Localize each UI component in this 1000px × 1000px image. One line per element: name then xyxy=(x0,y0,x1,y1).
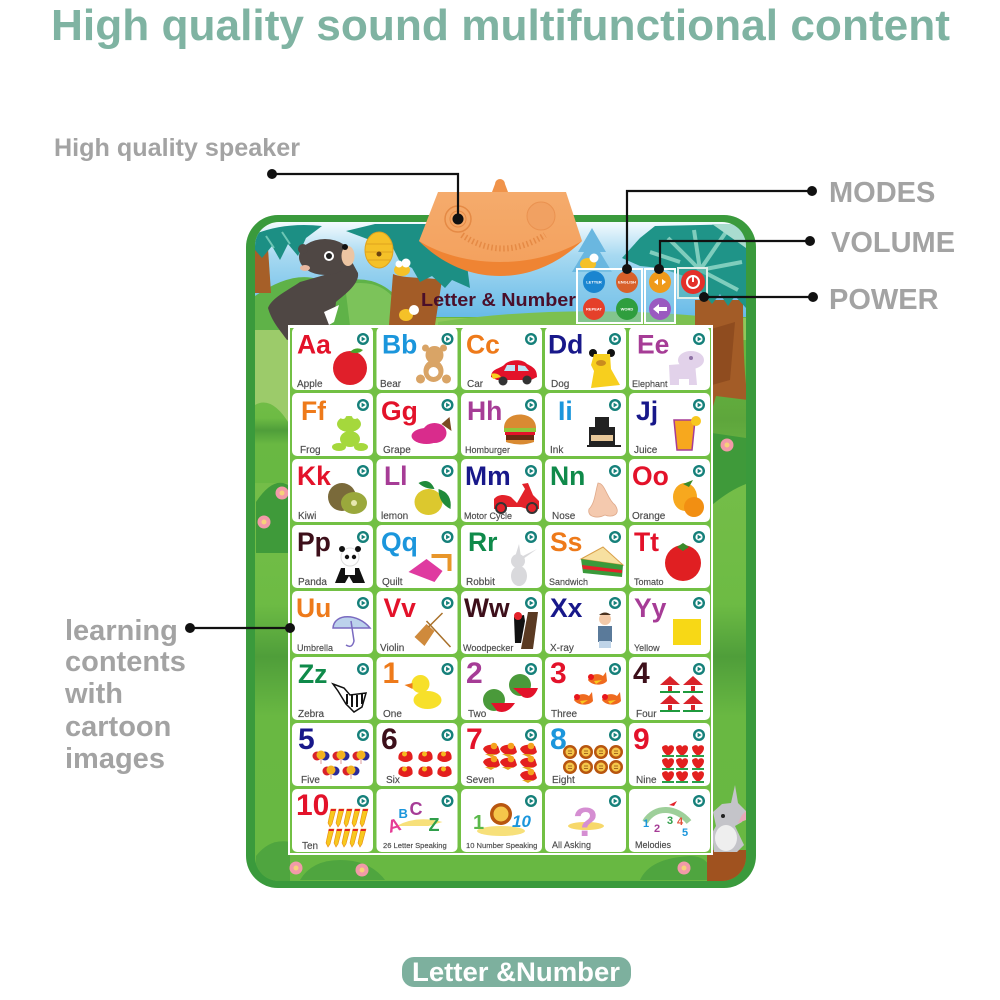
icon: ABC letters xyxy=(385,799,442,837)
card: Hh xyxy=(461,393,542,456)
icon: bee right xyxy=(580,254,598,270)
card: 8: Eight xyxy=(552,775,575,786)
card: Uu: Umbrella xyxy=(297,643,333,653)
card: 1: 1 xyxy=(382,657,399,690)
tree: right xyxy=(572,224,748,410)
card: 10 number speaking xyxy=(461,789,542,852)
card: Bb xyxy=(376,327,458,390)
icon: x-ray xyxy=(598,612,612,648)
card: Mm: Mm xyxy=(465,461,511,491)
card: Ww: Ww xyxy=(464,593,510,623)
card: Pp xyxy=(292,525,373,588)
icon: orange xyxy=(673,480,704,517)
card: Oo xyxy=(629,459,710,522)
callout line: learning contents xyxy=(185,623,295,633)
card: Zz: Zz xyxy=(298,659,327,689)
card: Ee: Ee xyxy=(637,330,669,360)
card: Zz xyxy=(292,657,373,720)
card: Kk: Kiwi xyxy=(298,511,316,522)
icon: rainbow and notes: 2 xyxy=(654,823,660,835)
card: Cc xyxy=(461,327,542,390)
icon: ten pencils xyxy=(326,809,368,847)
bush: bottom left xyxy=(256,841,290,881)
icon: rainbow and notes: 1 xyxy=(643,818,649,830)
card: Yy: Yellow xyxy=(634,643,660,653)
card: Aa: Aa xyxy=(297,330,331,360)
card: Ff: Frog xyxy=(300,445,321,456)
card: Hh: Homburger xyxy=(465,445,510,455)
button: repeat: REPEAT xyxy=(586,306,603,312)
label: volume: VOLUME xyxy=(831,227,955,259)
card: Aa: Apple xyxy=(297,379,323,390)
icon: rainbow and notes: 5 xyxy=(682,827,688,839)
card: Aa xyxy=(292,327,373,390)
icon: six flowers xyxy=(398,751,452,777)
icon: bee lower xyxy=(399,305,419,321)
icon: ABC letters: B xyxy=(398,806,408,821)
card: Ii: Ii xyxy=(558,396,573,426)
card: 8: 8 xyxy=(550,723,567,756)
control panel buttons xyxy=(577,268,707,323)
card: Vv: Vv xyxy=(384,593,416,623)
card: Xx: X-ray xyxy=(550,643,574,654)
card: Rr: Robbit xyxy=(466,577,495,588)
card: 3: 3 xyxy=(550,657,567,690)
icon: three hens xyxy=(574,672,621,705)
card: 5: 5 xyxy=(298,723,315,756)
icon: car xyxy=(491,360,537,386)
button: english: ENGLISH xyxy=(618,280,636,284)
icon: panda xyxy=(335,546,365,583)
card: Dd: Dog xyxy=(551,379,569,390)
card: Ss: Ss xyxy=(550,527,582,557)
card: Ee: Elephant xyxy=(632,379,668,389)
card: Pp: Pp xyxy=(297,527,331,557)
label: learning contents with cartoon images: learning xyxy=(65,615,178,647)
heading: letter and number: Letter & Number xyxy=(421,289,576,310)
icon: grape xyxy=(412,417,452,444)
icon: quilt xyxy=(408,554,452,582)
card: Dd: Dd xyxy=(548,330,583,360)
card: Jj: Jj xyxy=(636,396,658,426)
button: volume xyxy=(649,271,671,293)
button: letter: LETTER xyxy=(586,280,602,284)
card: Gg xyxy=(376,393,458,456)
card: Nn: Nn xyxy=(550,461,585,491)
icon: lemon xyxy=(414,481,451,515)
icon: yellow square xyxy=(673,619,701,645)
card: 9: Nine xyxy=(636,775,657,786)
card: Tt: Tomato xyxy=(634,577,664,587)
icon: lion with numbers xyxy=(473,803,531,836)
card: Hh: Hh xyxy=(467,396,502,426)
bush: right xyxy=(712,433,746,505)
card: 8 xyxy=(545,723,626,786)
card: 3: Three xyxy=(551,709,578,720)
icon: woodpecker xyxy=(514,612,538,649)
card: Rr: Rr xyxy=(468,527,497,557)
card: Jj: Juice xyxy=(634,445,658,456)
card: Ll xyxy=(376,459,458,522)
icon: seven ducks xyxy=(483,743,537,783)
icon: hamburger xyxy=(504,414,536,444)
card: Vv xyxy=(376,591,458,654)
card: 10 xyxy=(292,789,373,852)
card: Ww: Woodpecker xyxy=(463,643,513,653)
card: 26 letter speaking xyxy=(376,789,458,852)
tree: left xyxy=(255,225,322,293)
icon: tomato xyxy=(665,543,701,581)
icon: umbrella xyxy=(333,617,370,646)
card: 5: Five xyxy=(301,775,320,786)
button: word: WORD xyxy=(621,306,633,312)
card: all asking xyxy=(545,789,626,852)
icon: bear xyxy=(416,344,451,384)
card: Cc: Cc xyxy=(466,330,500,360)
card: Xx: Xx xyxy=(550,593,583,623)
card: 9 xyxy=(629,723,710,786)
card: Xx xyxy=(545,591,626,654)
icon: violin xyxy=(414,613,450,647)
callout line: volume xyxy=(654,236,815,274)
scene: sky and hills xyxy=(255,222,746,881)
card: 2: Two xyxy=(468,709,487,720)
card: Yy: Yy xyxy=(634,593,667,623)
icon: frog xyxy=(332,413,368,451)
icon: beehive xyxy=(365,232,393,268)
icon: zebra xyxy=(333,684,366,712)
label: learning contents with cartoon images xyxy=(64,615,186,775)
card: Rr xyxy=(461,525,542,588)
label: learning contents with cartoon images: cartoon xyxy=(65,711,171,743)
card: Qq xyxy=(376,525,458,588)
card: Vv: Violin xyxy=(380,643,404,654)
icon: rainbow and notes: 3 xyxy=(667,815,673,827)
card: Mm: Motor Cycle xyxy=(464,511,512,521)
button: back xyxy=(649,298,671,320)
card: 9: 9 xyxy=(633,723,650,756)
card: Ff: Ff xyxy=(301,396,326,426)
card: Ll: lemon xyxy=(381,511,408,522)
card: Bb: Bb xyxy=(382,330,417,360)
card: Nn xyxy=(545,459,626,522)
icon: eight lions xyxy=(563,745,623,774)
callout line: speaker xyxy=(267,169,464,224)
title: High quality sound multifunctional content xyxy=(51,1,950,50)
card: Ss: Sandwich xyxy=(549,577,588,587)
icon: lion with numbers: 1 xyxy=(473,812,484,834)
character: mole xyxy=(268,239,358,340)
card: Zz: Zebra xyxy=(298,709,325,720)
icon: lion with numbers: 10 xyxy=(512,812,531,831)
card: 6: Six xyxy=(386,775,400,786)
card: melodies: Melodies xyxy=(635,840,672,850)
card: 4 xyxy=(629,657,710,720)
icon: ABC letters: C xyxy=(410,799,422,819)
card: Jj xyxy=(629,393,710,456)
card: 4: 4 xyxy=(633,657,650,690)
character: bunny xyxy=(707,785,747,881)
alphabet and number grid xyxy=(288,325,713,855)
icon: duck xyxy=(404,675,442,709)
button: power xyxy=(681,270,705,294)
card: Tt xyxy=(629,525,710,588)
callout line: modes xyxy=(622,186,817,274)
card: 1 xyxy=(376,657,458,720)
tree: centre with hive xyxy=(346,224,470,325)
icon: nine strawberries xyxy=(662,745,704,782)
callout line: power xyxy=(699,292,818,302)
card: Qq: Qq xyxy=(381,527,418,557)
icon: bee top centre xyxy=(394,258,410,276)
footer pill: letter and number: Letter &Number xyxy=(412,957,621,987)
card: Mm xyxy=(461,459,542,522)
card: Qq: Quilt xyxy=(382,577,403,588)
card: Gg: Grape xyxy=(383,445,411,456)
icon: nose xyxy=(589,483,617,517)
card: Bb: Bear xyxy=(380,379,402,390)
icon: motorcycle xyxy=(494,483,539,513)
label: high quality speaker: High quality speaker xyxy=(54,134,300,162)
flowers xyxy=(258,438,734,876)
card: Kk: Kk xyxy=(297,461,331,491)
card: 6 xyxy=(376,723,458,786)
card: Cc: Car xyxy=(467,379,484,390)
card: Dd xyxy=(545,327,626,390)
card: Pp: Panda xyxy=(298,577,327,588)
card: Nn: Nose xyxy=(552,511,576,522)
card: Oo: Orange xyxy=(632,511,666,522)
icon: question mark: ? xyxy=(573,799,598,845)
card: Ww xyxy=(461,591,542,654)
card: Ii: Ink xyxy=(550,445,564,456)
icon: four houses xyxy=(660,676,703,712)
board: green wall chart xyxy=(246,215,756,888)
card: Uu: Uu xyxy=(296,593,331,623)
speaker xyxy=(419,179,582,276)
card: Kk xyxy=(292,459,373,522)
icon: balloons xyxy=(312,750,370,779)
icon: rabbit xyxy=(511,544,537,586)
card: Ff xyxy=(292,393,373,456)
card: Ll: Ll xyxy=(384,461,408,491)
card: 7 xyxy=(461,723,542,786)
card: melodies xyxy=(629,789,710,852)
card: Uu xyxy=(292,591,373,654)
bush: left xyxy=(256,483,290,553)
label: power: POWER xyxy=(829,284,939,316)
icon: rainbow and notes xyxy=(643,801,689,839)
card: all asking: All Asking xyxy=(552,840,591,850)
icon: ABC letters: Z xyxy=(428,815,440,835)
label: learning contents with cartoon images: contents xyxy=(65,646,186,678)
card: 10: 10 xyxy=(296,789,329,822)
card: Ee xyxy=(629,327,710,390)
card: 7: 7 xyxy=(466,723,483,756)
card: Yy xyxy=(629,591,710,654)
card: 1: One xyxy=(383,709,402,720)
icon: kiwi xyxy=(328,483,367,514)
icon: sandwich xyxy=(581,547,623,577)
icon: rainbow and notes: 4 xyxy=(677,816,684,828)
card: Ss xyxy=(545,525,626,588)
label: learning contents with cartoon images: images xyxy=(65,743,165,775)
card: 10: Ten xyxy=(302,841,318,852)
icon: dog xyxy=(589,349,620,388)
icon: ABC letters: A xyxy=(385,814,403,837)
bush: bottom right xyxy=(640,856,712,880)
icon: ink bottle xyxy=(587,417,621,447)
card: 2: 2 xyxy=(466,657,483,690)
card: 3 xyxy=(545,657,626,720)
card: 5 xyxy=(292,723,373,786)
icon: juice xyxy=(674,416,701,450)
card: Tt: Tt xyxy=(634,527,659,557)
icon: apple xyxy=(333,348,367,385)
icon: elephant xyxy=(669,351,704,385)
card: Gg: Gg xyxy=(381,396,418,426)
card: Ii xyxy=(545,393,626,456)
card: 6: 6 xyxy=(381,723,398,756)
label: modes: MODES xyxy=(829,177,935,209)
card: 26 letter speaking: 26 Letter Speaking xyxy=(383,841,447,850)
card: 7: Seven xyxy=(466,775,494,786)
card: 2 xyxy=(461,657,542,720)
label: learning contents with cartoon images: with xyxy=(64,678,123,710)
card: 10 number speaking: 10 Number Speaking xyxy=(466,841,537,850)
card: 4: Four xyxy=(636,709,657,720)
icon: watermelons xyxy=(483,674,538,712)
card: Oo: Oo xyxy=(632,461,669,491)
